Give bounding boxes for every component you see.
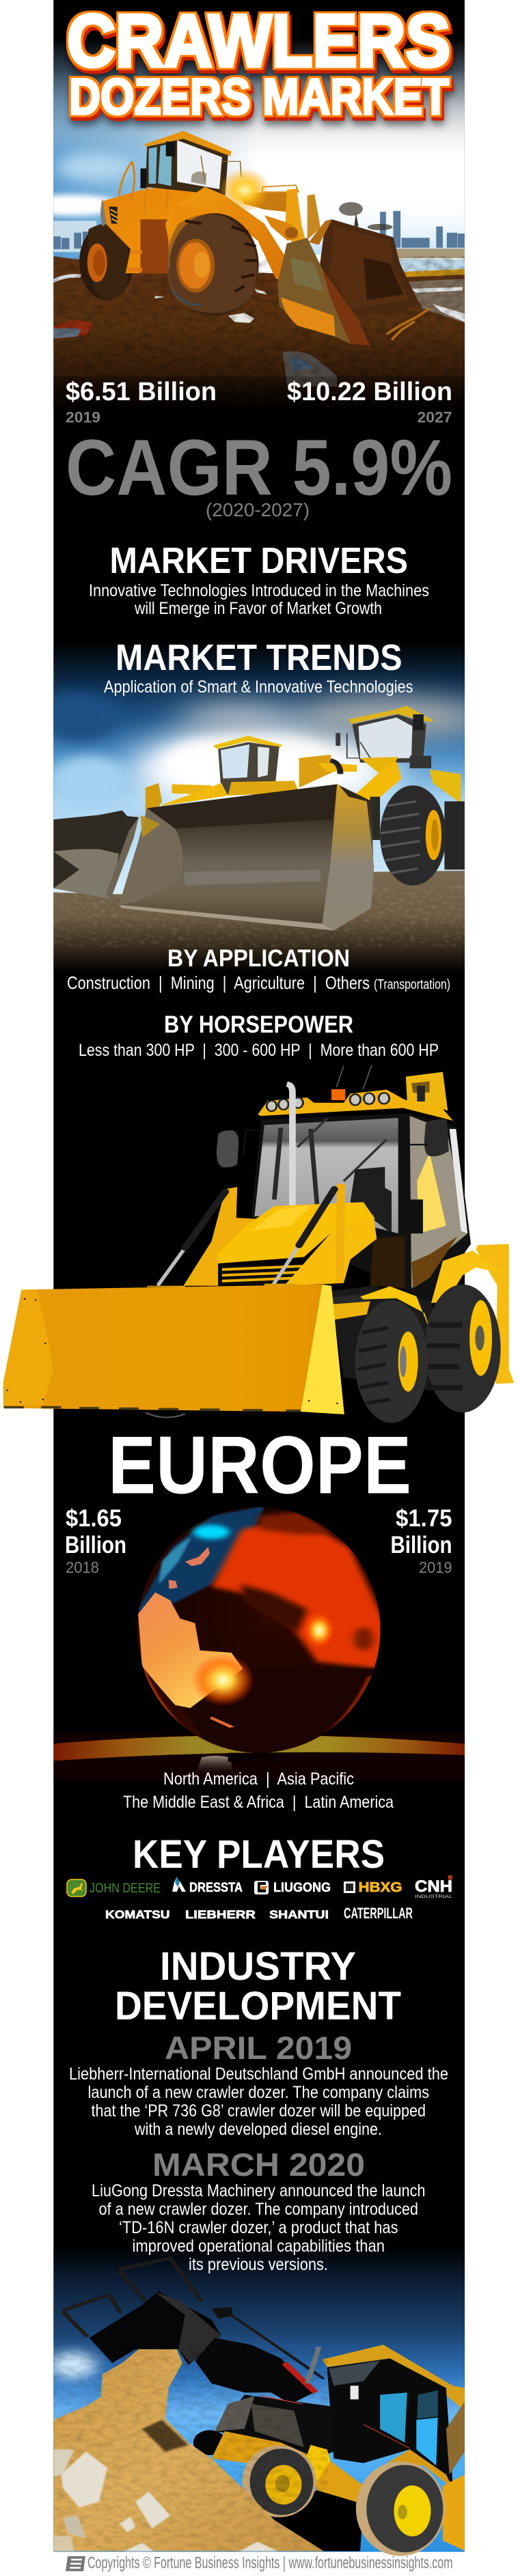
event: April 2019: launch of a new crawler dozer. The company claims [87,2083,429,2102]
event: April 2019: APRIL 2019 [165,2030,352,2066]
icon: Fortune Business Insights logo [66,2556,85,2571]
event: April 2019 [69,2030,448,2139]
front wheel [355,1300,428,1423]
event: March 2020: MARCH 2020 [152,2146,365,2183]
loader body and rear frame [100,161,231,273]
city skyline [53,211,465,249]
panel: photo of yellow loaders with buckets [40,642,489,972]
loader rear wheel [79,224,133,300]
sand pile [53,2349,328,2551]
background loader [146,736,357,815]
under-body [331,1250,506,1390]
event: April 2019: that the ‘PR 736 G8’ crawler dozer will be equipped [92,2101,426,2120]
mirrors [217,1119,449,1167]
logo: HBXG [344,1880,402,1895]
title: Crawlers Dozers Market [67,0,450,125]
event: March 2020: improved operational capabilities than [133,2237,385,2256]
cab [322,2344,465,2484]
red clouds [211,1516,387,1668]
panel: hero photo of orange wheel loader [21,0,465,410]
application segments: (Transportation) [374,977,450,992]
rear wheel [356,2461,445,2556]
exhaust pipe [287,1084,292,1206]
hero sky [21,0,465,283]
heading: industry development: DEVELOPMENT [115,1984,401,2028]
footer: copyright [66,2554,452,2572]
water [393,259,465,272]
main bucket [119,783,374,931]
shadow under machine [264,2491,364,2551]
stat: Europe 2019 [391,1505,452,1576]
stat: 2019 market size [66,378,217,426]
market trends text: Application of Smart & Innovative Technologies [104,677,413,697]
market drivers text: will Emerge in Favor of Market Growth [134,599,382,618]
heading: by horsepower: BY HORSEPOWER [164,1011,353,1038]
stat: 2027 market size: 2027 [417,408,452,426]
left bucket [53,811,139,899]
hood [217,1202,375,1285]
logo: Dressta: DRESSTA [189,1881,243,1895]
trends sky [40,642,489,897]
stat: 2019 market size: $6.51 Billion [66,378,217,406]
heading: key players: KEY PLAYERS [133,1832,385,1877]
application segments: Construction | Mining | Agriculture | Others [67,972,370,993]
blade underside [146,1412,185,1418]
heading: market drivers: MARKET DRIVERS [109,540,408,581]
lift arm left [183,1187,261,1286]
tree [339,202,392,230]
loader front wheel [167,213,259,316]
stat: Europe 2018: $1.65 [66,1505,122,1532]
logos: key players [67,1875,453,1922]
market drivers text [89,581,429,618]
hydraulic rams [159,1189,334,1285]
globe [135,1506,387,1762]
logo: CNH Industrial: INDUSTRIAL [415,1894,453,1899]
ocean and blue clouds [135,1506,264,1614]
front loader cab [336,705,461,804]
CAGR figure: CAGR 5.9% [66,423,452,512]
heading: industry development: INDUSTRY [160,1944,356,1989]
event: March 2020: its previous versions. [189,2255,328,2274]
title: Crawlers Dozers Market: CRAWLERS [67,0,450,83]
stat: 2019 market size: 2019 [66,408,100,426]
event: April 2019: Liebherr-International Deutschland GmbH announced the [69,2064,448,2084]
stat: Europe 2018: 2018 [66,1558,99,1576]
other regions [123,1769,394,1812]
logo: John Deere: JOHN DEERE [90,1881,161,1896]
rear wheel [424,1285,501,1412]
illustration: yellow backhoe loader with blade [3,1065,514,1423]
title: Crawlers Dozers Market: DOZERS MARKET [69,68,449,125]
heading: by application: BY APPLICATION [167,945,350,972]
other regions: The Middle East & Africa | Latin America [123,1793,394,1812]
loader bucket [277,219,430,346]
loader lift arm with sun flare [165,168,321,280]
event: March 2020: ‘TD-16N crawler dozer,’ a product that has [119,2218,398,2237]
black infographic panel [53,0,465,2551]
front wheel [242,2446,316,2517]
yellow loader arm [356,761,402,800]
land mass [138,1593,243,1709]
other regions: North America | Asia Pacific [163,1769,354,1789]
logo: Caterpillar: CATERPILLAR [344,1905,413,1922]
muddy ground [53,256,465,410]
front tyre and rim [370,785,465,886]
stat: Europe 2018: Billion [65,1532,126,1558]
blade [3,1284,344,1414]
stat: 2027 market size: $10.22 Billion [287,378,452,406]
CAGR period: (2020-2027) [206,499,310,520]
horsepower segments: Less than 300 HP | 300 - 600 HP | More than 600 HP [79,1041,439,1060]
logo: HBXG: HBXG [358,1880,402,1895]
event: March 2020: LiuGong Dressta Machinery announced the launch [92,2181,425,2200]
islands [169,1547,210,1589]
stat: Europe 2019: $1.75 [396,1505,452,1532]
logo: Liebherr: LIEBHERR [185,1908,256,1921]
stat: Europe 2019: Billion [391,1532,452,1558]
panel: globe illustration [53,1506,465,1780]
logo: Komatsu: KOMATSU [105,1908,169,1921]
logo: John Deere [67,1879,161,1896]
stat: Europe 2018 [65,1505,126,1576]
loader cab [141,131,241,195]
heading: market trends: MARKET TRENDS [115,637,402,678]
trends ground [53,871,465,972]
lower body [185,1668,380,1755]
logo: Shantui: SHANTUI [269,1908,329,1921]
heading: industry development [115,1944,401,2028]
event: April 2019: with a newly developed diesel engine. [134,2120,382,2139]
cab [251,1113,471,1302]
market drivers text: Innovative Technologies Introduced in the Machines [89,581,429,600]
event: March 2020: of a new crawler dozer. The company introduced [98,2200,418,2219]
logo: LiuGong: LIUGONG [273,1881,331,1895]
roof and lights [258,1089,458,1125]
event: March 2020 [92,2146,425,2274]
rear cylinder and stabiliser [476,1244,514,1384]
sky [50,2247,465,2552]
panel: photo of backhoe loader dumping sand [50,2247,465,2556]
body side frame [284,1215,377,1286]
heading: Europe: EUROPE [108,1419,411,1511]
yellow chassis [211,2431,465,2551]
raised bucket and arm [63,2258,324,2404]
stat: Europe 2019: 2019 [419,1558,452,1576]
antennas [336,1065,372,1090]
logo: CNH Industrial: CNH [415,1877,452,1896]
logo: Dressta [172,1877,243,1895]
machine engine bay [193,2395,344,2459]
floor glow [53,1735,465,1780]
hot spots [303,1611,336,1650]
rocks [53,2450,277,2551]
stat: 2027 market size [287,378,452,426]
rear arm [406,1072,448,1110]
